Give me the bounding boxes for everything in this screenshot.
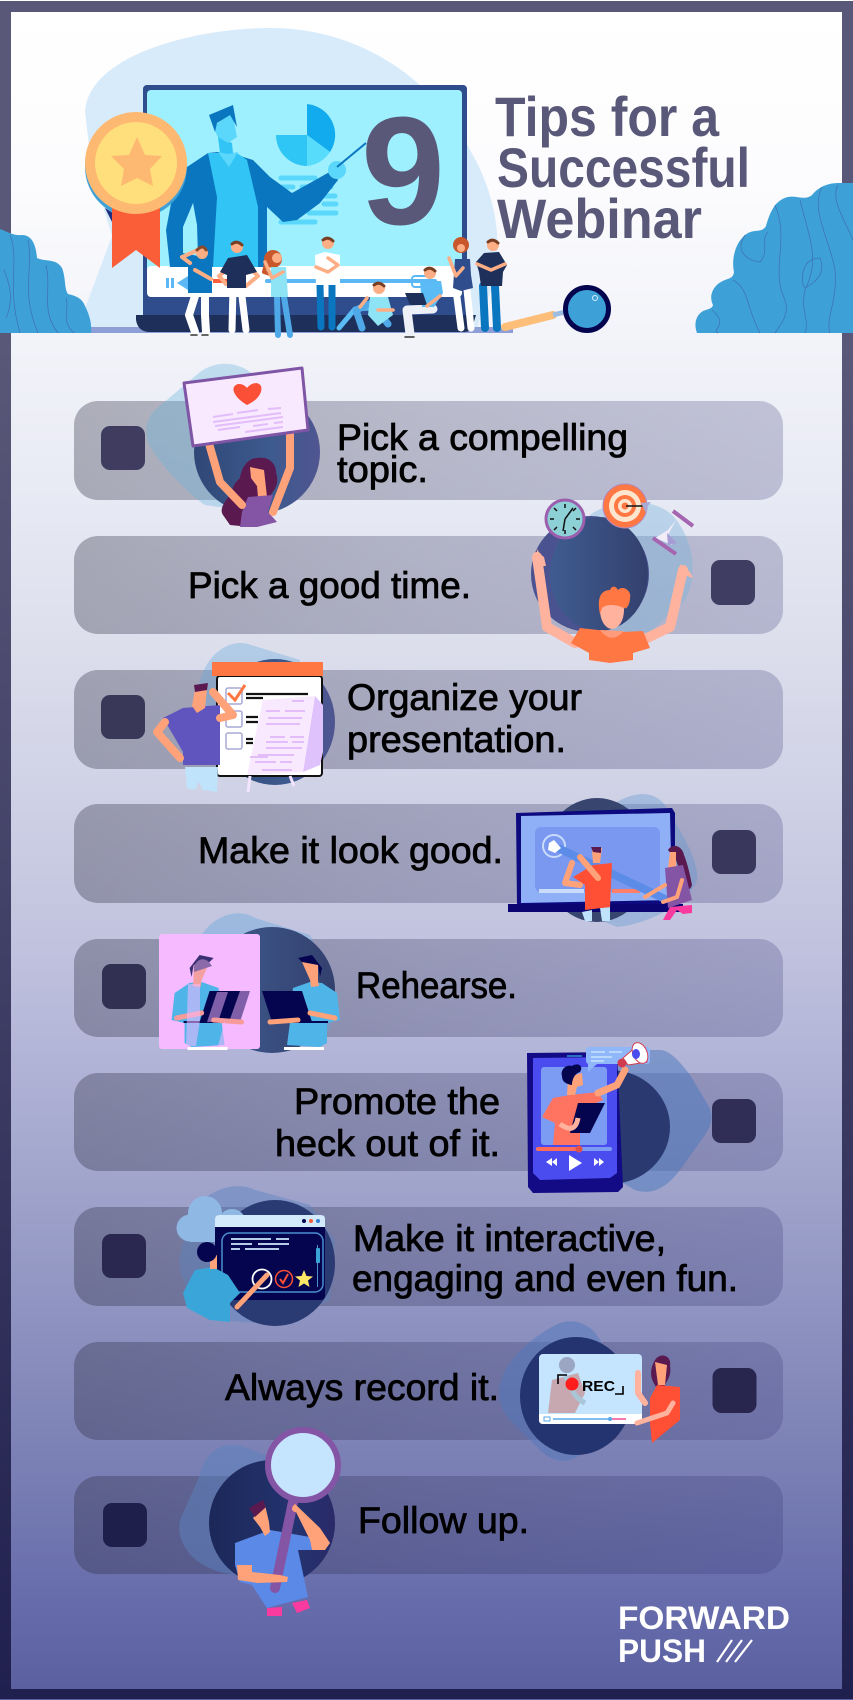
tip text: Rehearse. [356,965,517,1006]
logo [618,1600,790,1669]
left bush [0,229,91,333]
tip bar [74,1073,783,1171]
tip bar [74,939,783,1037]
person 1 [182,247,212,335]
person right [262,955,340,1050]
tip text: Pick a compelling [337,417,628,458]
bullet square [102,964,146,1009]
chart text lines [281,178,336,222]
header illustration [0,28,853,337]
tip text [337,417,628,490]
tip text: Organize your [347,677,582,718]
icon: person holding heart card [146,364,320,527]
presenter [166,105,366,267]
bullet square [712,1368,756,1413]
tip text: Always record it. [225,1367,499,1408]
panel: tip 1 [74,364,783,527]
medal [85,112,187,268]
person 3 [264,250,290,335]
icon: two people with laptops [159,913,340,1053]
tip text: Follow up. [358,1500,529,1541]
person 6 [405,267,443,337]
tip text [352,1218,738,1299]
title: Webinar [497,187,702,250]
tip text: Make it look good. [198,830,503,871]
panel: tip 6 [74,1040,783,1193]
background blob [78,28,498,327]
cloud [176,1196,246,1242]
bullet square [102,1234,146,1278]
panel: tip 3 [74,643,783,792]
bullet square [712,1099,756,1143]
tip text: topic. [337,449,428,490]
title: Tips for a [495,85,720,148]
person 7 [449,237,473,328]
icon: person at browser window [176,1186,335,1326]
bullet square [101,426,145,470]
tip bar [74,804,783,903]
ground strip [90,327,513,333]
panel: tip 2 [74,484,783,663]
tip text: heck out of it. [275,1123,500,1164]
tip text: Promote the [294,1081,500,1122]
person 4 [315,237,340,327]
icon: recording screen with woman [499,1321,680,1461]
REC label: REC [582,1378,615,1395]
bullet square [101,695,145,739]
right bush [695,183,853,333]
bullet square [711,560,755,605]
person 8 [476,239,507,328]
panel: tip 8 [74,1321,783,1461]
tip text: Make it interactive, [353,1218,666,1259]
panel: tip 7 [74,1186,783,1326]
tip text [275,1081,500,1164]
tip bar [74,536,783,634]
big number 9: 9 [361,85,445,257]
panel: tip 4 [74,794,783,927]
icon: person juggling clock target hourglass [531,484,693,663]
bullet square [103,1503,147,1547]
small people [182,237,507,337]
tip text: engaging and even fun. [352,1258,738,1299]
tip text: presentation. [347,719,566,760]
tip bar [74,670,783,769]
logo: FORWARD [618,1600,790,1636]
tip text: Pick a good time. [188,565,471,606]
tip bar [74,1476,783,1574]
magnifying glass [505,288,608,330]
tip text [347,677,582,760]
icon: phone with megaphone [527,1040,712,1193]
person 2 [219,241,258,330]
title [495,85,750,250]
laptop [136,85,476,332]
icon: laptop with people [508,794,697,927]
icon: person with checklist [157,643,335,792]
panel: tip 9 [74,1430,783,1616]
person left [172,955,250,1050]
pink panel [159,934,260,1049]
tip bar [74,1342,783,1440]
icon: person with magnifying glass [179,1430,338,1616]
tip bar [74,1207,783,1306]
bullet square [712,830,756,874]
person 5 [339,282,393,328]
tip bar [74,401,783,500]
pie chart [276,104,335,166]
title: Successful [497,136,750,199]
panel: tip 5 [74,913,783,1053]
logo: PUSH [618,1633,706,1669]
